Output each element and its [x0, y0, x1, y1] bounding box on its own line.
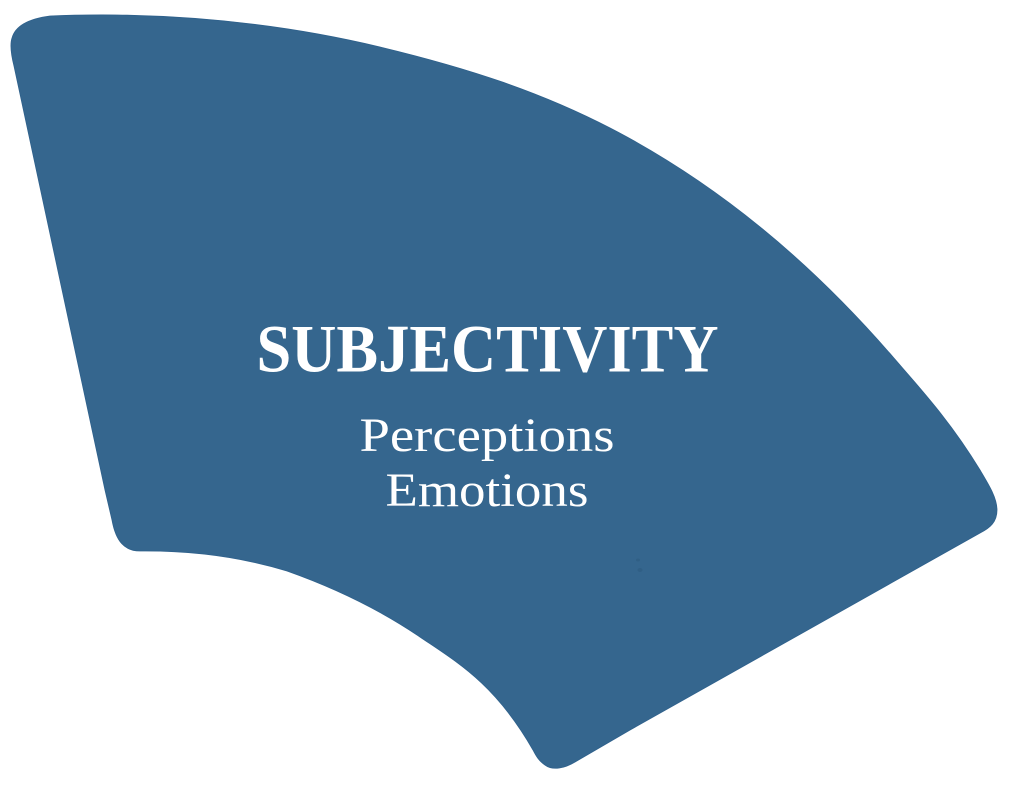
heading: SUBJECTIVITY [256, 310, 718, 386]
text block: perceptions and emotions: Perceptions [360, 409, 614, 462]
text block: perceptions and emotions: Emotions [386, 464, 588, 517]
text block: perceptions and emotions [360, 409, 614, 517]
